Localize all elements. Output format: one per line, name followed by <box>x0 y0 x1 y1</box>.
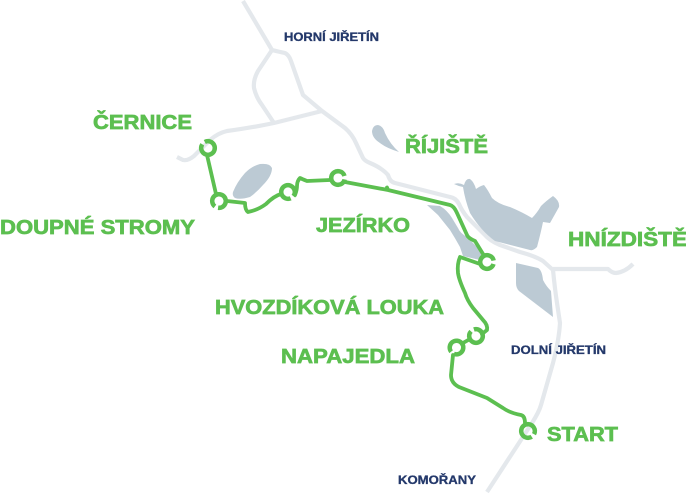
stop: Start <box>519 422 537 440</box>
lakes <box>233 125 559 317</box>
label: Doupné stromy: DOUPNÉ STROMY <box>0 216 196 239</box>
label: Jezírko: JEZÍRKO <box>316 214 410 237</box>
label: Černice: ČERNICE <box>93 110 192 134</box>
stop: Jezírko <box>330 170 346 186</box>
town: Dolní Jiřetín: DOLNÍ JIŘETÍN <box>511 344 606 357</box>
town: Komořany: KOMOŘANY <box>398 474 476 487</box>
label: Napajedla: NAPAJEDLA <box>281 346 415 368</box>
road network <box>177 1 633 492</box>
label: Hnízdiště: HNÍZDIŠTĚ <box>568 227 686 251</box>
stop: Napajedla <box>447 338 466 357</box>
label: Hvozdíková louka: HVOZDÍKOVÁ LOUKA <box>215 296 444 319</box>
route line <box>207 155 525 423</box>
stop: Černice <box>199 139 217 157</box>
stop: Hnízdiště <box>479 254 495 270</box>
stop: Hvozdíková louka <box>467 327 485 345</box>
stop: Doupné stromy <box>209 191 229 211</box>
label: Říjiště: ŘÍJIŠTĚ <box>405 134 488 158</box>
town: Horní Jiřetín: HORNÍ JIŘETÍN <box>284 31 379 44</box>
label: Start: START <box>547 424 618 446</box>
stop: Jezírko area stop <box>279 183 297 201</box>
